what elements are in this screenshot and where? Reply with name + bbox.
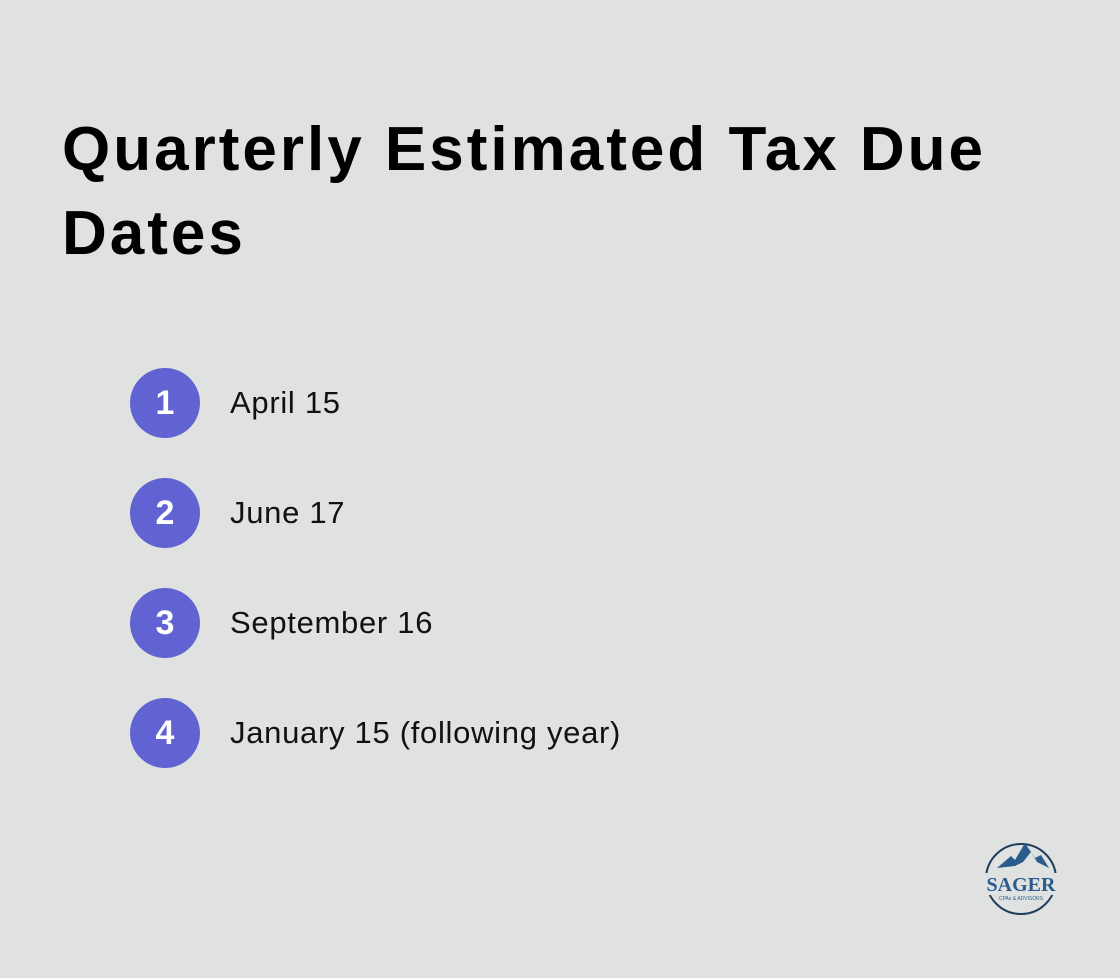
item 3 [130,588,433,658]
item 4: January 15 (following year) [230,715,621,750]
logo: CPAs & ADVISORS [999,896,1044,902]
item 3: September 16 [230,605,433,640]
title: Dates [62,199,246,268]
item 4: 4 [156,714,174,752]
logo [986,843,1056,915]
item 1: April 15 [230,385,341,420]
item 1 [130,368,341,438]
logo: SAGER [987,874,1056,896]
item 1: 1 [156,384,174,422]
item 2: June 17 [230,495,345,530]
title [62,115,986,268]
item 4 [130,698,621,768]
item 2: 2 [156,494,174,532]
title: Quarterly Estimated Tax Due [62,115,986,184]
item 3: 3 [156,604,174,642]
item 2 [130,478,345,548]
